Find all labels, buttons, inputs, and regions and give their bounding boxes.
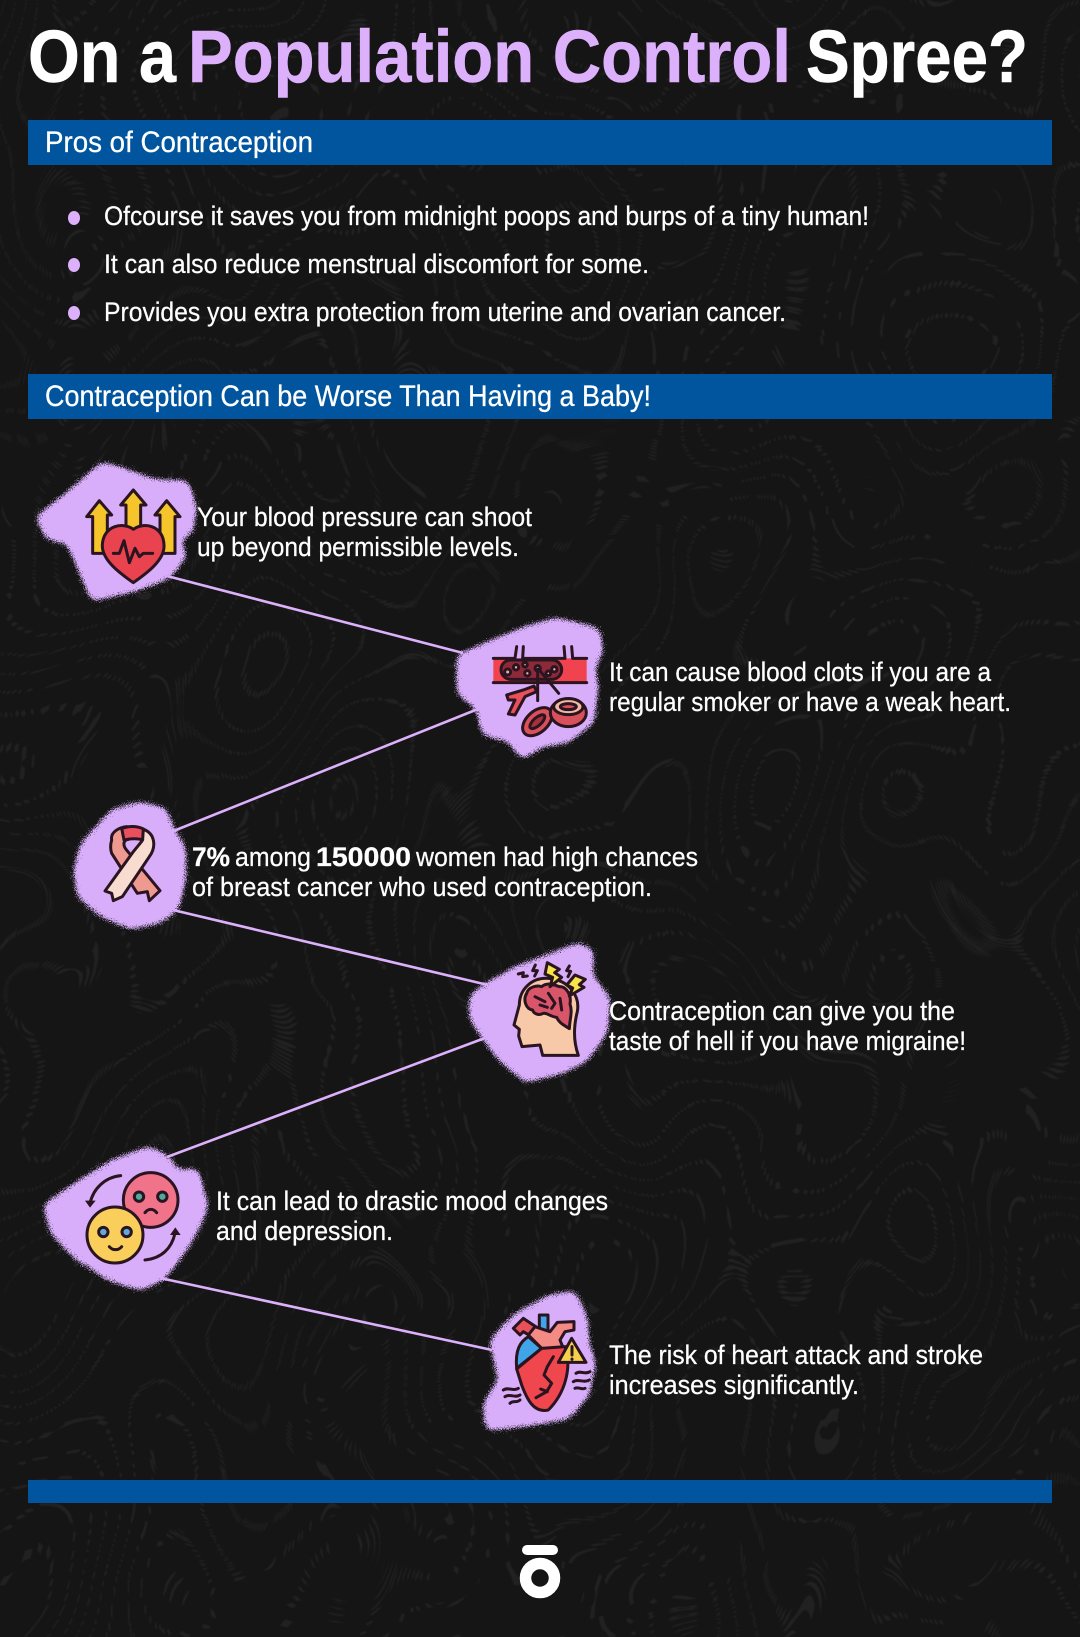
- title: [28, 15, 1028, 98]
- text: heart attack: increases significantly.: [609, 1370, 859, 1400]
- item: migraine: [469, 943, 966, 1083]
- pros list: [68, 201, 869, 327]
- pro bullet 3: Provides you extra protection from uterine and ovarian cancer.: [104, 297, 786, 327]
- pro bullet 1: Ofcourse it saves you from midnight poops and burps of a tiny human!: [104, 201, 869, 231]
- text: breast cancer statistic: among: [235, 842, 311, 872]
- text: breast cancer statistic: [192, 842, 698, 902]
- text: migraine: [609, 996, 966, 1056]
- heading bar: contraception can be worse: Contraception Can be Worse Than Having a Baby!: [45, 380, 651, 413]
- item: breast cancer: [73, 802, 698, 929]
- icon: heart with rising arrows: [35, 462, 197, 602]
- text: blood clots: [609, 657, 1011, 717]
- connector lines: [160, 576, 492, 1350]
- title: Population Control: [188, 15, 791, 98]
- icon: sad and happy faces: [43, 1146, 208, 1291]
- icon: awareness ribbon: [73, 802, 186, 929]
- item: blood clots: [457, 617, 1011, 760]
- text: mood changes: It can lead to drastic mood changes: [216, 1186, 608, 1216]
- text: heart attack: The risk of heart attack and stroke: [609, 1340, 983, 1370]
- text: migraine: taste of hell if you have migraine!: [609, 1026, 966, 1056]
- text: blood pressure: up beyond permissible levels.: [197, 532, 519, 562]
- text: blood clots: It can cause blood clots if you are a: [609, 657, 992, 687]
- text: breast cancer statistic: 7%: [192, 842, 230, 872]
- footer bar: [28, 1480, 1052, 1503]
- icon: head with brain and lightning: [469, 943, 611, 1083]
- text: breast cancer statistic: women had high chances: [415, 842, 698, 872]
- text: breast cancer statistic: 150000: [316, 842, 411, 872]
- text: blood pressure: [197, 502, 532, 562]
- text: migraine: Contraception can give you the: [609, 996, 955, 1026]
- heading bar: pros of contraception: Pros of Contraception: [45, 126, 313, 159]
- item: heart attack: [483, 1291, 983, 1431]
- heading bar: contraception can be worse: [28, 374, 1052, 419]
- text: mood changes: and depression.: [216, 1216, 393, 1246]
- text: heart attack: [609, 1340, 983, 1400]
- item: mood changes: [43, 1146, 608, 1291]
- pro bullet 2: It can also reduce menstrual discomfort for some.: [104, 249, 649, 279]
- icon: anatomical heart with warning: [483, 1291, 596, 1431]
- text: blood pressure: Your blood pressure can shoot: [197, 502, 532, 532]
- heading bar: pros of contraception: [28, 120, 1052, 165]
- item: blood pressure: [35, 462, 532, 602]
- text: breast cancer statistic: of breast cancer who used contraception.: [192, 872, 652, 902]
- text: mood changes: [216, 1186, 608, 1246]
- title: On a: [28, 15, 177, 98]
- text: blood clots: regular smoker or have a weak heart.: [609, 687, 1011, 717]
- logo: [522, 1545, 558, 1592]
- title: Spree?: [806, 15, 1028, 98]
- icon: blood vessel and cells: [457, 617, 603, 760]
